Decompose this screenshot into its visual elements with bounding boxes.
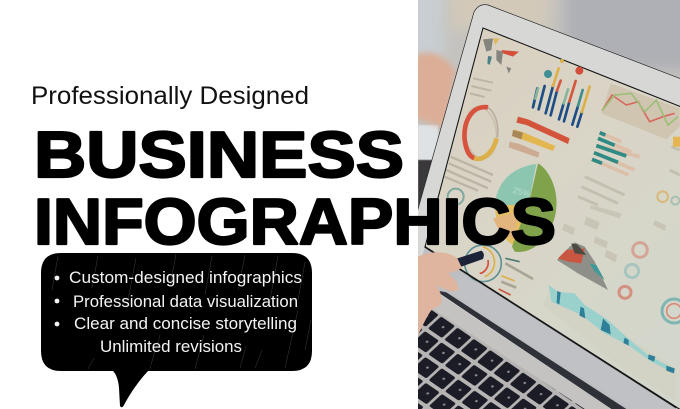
hand holding pen	[418, 251, 484, 335]
line chart	[601, 83, 680, 139]
chart legend	[499, 258, 533, 295]
bullet list	[55, 269, 302, 356]
ring charts	[619, 243, 680, 323]
label blocks	[562, 205, 666, 262]
keyboard deck	[440, 296, 612, 409]
subtitle: Professionally Designed	[31, 82, 309, 110]
world map	[483, 38, 519, 73]
title line 1: BUSINESS	[34, 118, 404, 191]
keyboard keys	[418, 309, 585, 409]
striped progress bars	[592, 133, 640, 175]
pale bars below area chart	[543, 288, 676, 402]
small ring icons	[448, 189, 679, 205]
photo backdrop	[418, 0, 680, 208]
horizontal bar chart	[509, 117, 570, 158]
item 2: Professional data visualization	[73, 293, 298, 311]
blurred hand in background	[415, 53, 455, 128]
text lines under map	[470, 78, 493, 97]
circular gauge	[465, 245, 501, 282]
photo: laptop showing dashboards	[405, 0, 680, 409]
screen charts, lower group	[418, 205, 680, 409]
screen bottom edge	[425, 247, 676, 408]
item 3: Clear and concise storytelling	[74, 315, 297, 333]
text block	[445, 157, 493, 191]
silver bezel bottom	[450, 273, 676, 409]
donut chart	[462, 105, 500, 161]
bubble body with tail	[41, 253, 312, 407]
hinge strip	[435, 290, 626, 409]
text lines right	[578, 147, 680, 205]
item 4: Unlimited revisions	[100, 338, 242, 356]
pie chart	[495, 163, 557, 207]
lower bezel strip	[418, 247, 680, 409]
pie chart: 25%	[512, 185, 531, 199]
speech bubble	[41, 253, 312, 407]
laptop screen	[425, 28, 680, 409]
chart pins	[544, 59, 583, 78]
area chart	[549, 285, 675, 373]
laptop lid bezel	[416, 5, 680, 409]
item 1: Custom-designed infographics	[69, 269, 302, 287]
mountain chart	[557, 242, 608, 290]
pie chart remainder	[493, 205, 556, 252]
screen charts, upper group	[445, 38, 680, 207]
grouped bar chart	[533, 68, 590, 127]
yellow block right	[673, 137, 680, 147]
title line 2: INFOGRAPHICS	[34, 185, 556, 258]
